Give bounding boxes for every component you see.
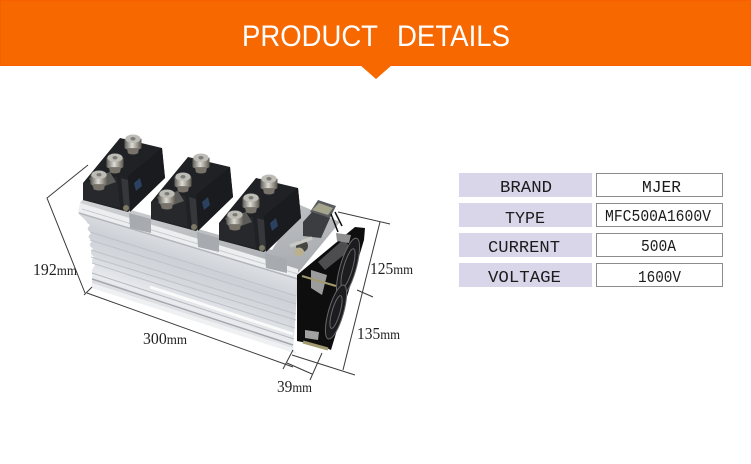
row: type: TYPE <box>505 210 545 229</box>
power module 2 <box>151 154 233 252</box>
terminal block and thermostat <box>290 200 342 256</box>
row: brand <box>459 173 722 198</box>
banner pointer <box>360 65 392 79</box>
header banner <box>0 0 751 79</box>
row: voltage <box>459 263 722 288</box>
title: DETAILS <box>397 20 510 53</box>
dimension label: 39mm: 39mm <box>277 377 312 396</box>
row: type: MFC500A1600V <box>605 208 712 227</box>
specification table <box>459 173 722 288</box>
heatsink body <box>78 197 340 354</box>
row: type <box>459 203 722 229</box>
dimension label: 300mm: 300mm <box>143 329 187 348</box>
cooling fan <box>297 227 365 350</box>
power module 3 <box>219 174 301 273</box>
row: current: CURRENT <box>488 239 560 258</box>
dimension label: 135mm: 135mm <box>357 324 400 343</box>
title: PRODUCT <box>242 20 378 53</box>
row: current <box>459 233 722 258</box>
power module 1 <box>83 134 165 233</box>
row: brand: BRAND <box>500 179 552 198</box>
row: brand: MJER <box>642 179 681 198</box>
row: voltage: VOLTAGE <box>488 269 561 288</box>
product photo: heatsink with modules and fan <box>78 134 365 354</box>
row: voltage: 1600V <box>638 269 682 288</box>
dimension label: 192mm: 192mm <box>33 260 77 279</box>
dimension label: 125mm: 125mm <box>370 259 413 278</box>
row: current: 500A <box>641 238 677 257</box>
heatsink front plate band <box>78 203 298 279</box>
dimension lines <box>47 165 390 380</box>
